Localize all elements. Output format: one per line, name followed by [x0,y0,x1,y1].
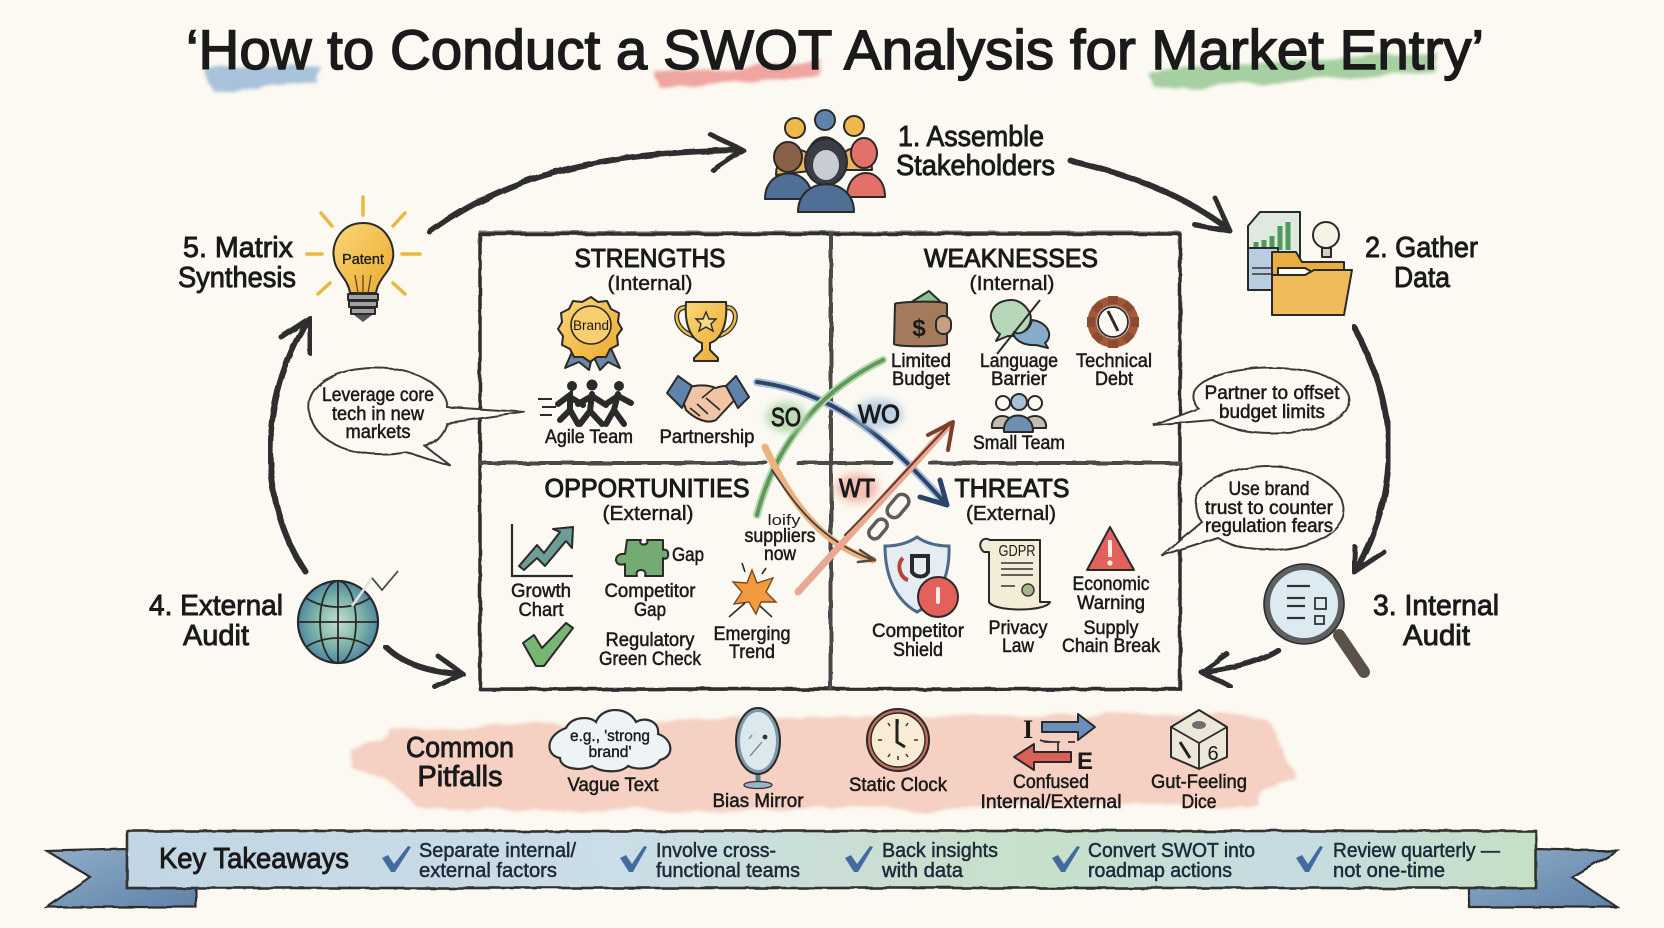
label: step 1 [896,121,1055,182]
heading: common pitfalls [406,732,514,793]
label: supply chain break: Supply [1084,618,1139,639]
panel: weaknesses [891,243,1152,454]
item: vague text cloud [549,710,670,796]
icon: language barrier [991,300,1049,354]
step 3: internal audit [1264,564,1499,672]
takeaway 2: functional teams [656,860,800,882]
label: language barrier: Barrier [991,369,1048,390]
takeaway 3: with data [881,860,964,882]
panel: strengths [538,243,754,448]
icon: stakeholders group [765,110,885,212]
arrow: WT [798,422,953,592]
takeaway 1: Separate internal/ [419,840,576,862]
icon: brand medal: Brand [573,317,609,333]
item: gut-feeling dice: 6 [1207,743,1219,765]
label: limited budget: Limited [891,351,951,372]
label: competitor gap: Competitor [604,581,696,602]
takeaway 3 [845,840,998,882]
label: economic warning: Economic [1072,574,1150,595]
icon: competitor shield [885,537,958,617]
item: confused internal external: Confused [1013,772,1089,793]
icon: green check [523,623,573,666]
item: confused internal external: Internal/External [980,792,1122,813]
label: language barrier: Language [980,351,1058,372]
label: step 5: Synthesis [178,262,296,294]
step 5: matrix synthesis [178,197,420,322]
item: static clock: Static Clock [849,775,947,796]
icon: growth chart [512,524,573,576]
callout: use brand trust [1162,466,1344,556]
callout: use brand trust: trust to counter [1205,498,1334,519]
label: competitor shield: Competitor [872,621,965,642]
label: small team: Small Team [973,433,1065,454]
label: technical debt [1076,351,1152,390]
callout: leverage core tech: Leverage core [322,385,434,406]
label: step 2: Data [1394,262,1451,294]
step 1: assemble stakeholders [765,110,1055,212]
callout: leverage core tech: markets [346,422,410,443]
label: competitor gap: Gap [634,600,666,621]
icon: technical debt gear [1087,296,1139,348]
label: gap: Gap [672,545,704,566]
label: emerging trend [714,624,790,663]
heading: strengths: STRENGTHS [574,243,726,273]
label: technical debt: Technical [1076,351,1152,372]
takeaway 5 [1296,840,1500,882]
callout: leverage core tech: tech in new [332,404,424,425]
label: step 5 [178,232,296,294]
icon: broken chain [866,492,912,541]
note: suppliers: suppliers [744,526,816,547]
panel: threats [866,473,1160,661]
arrow: step 2 to 3 [1354,327,1389,572]
label: competitor shield: Shield [893,640,943,661]
item: gut-feeling dice [1151,710,1247,813]
label: economic warning: Warning [1077,593,1145,614]
item: vague text cloud: Vague Text [568,775,659,796]
label: step 4: Audit [183,620,249,652]
ribbon tail: right [1469,849,1617,907]
callout: use brand trust: regulation fears [1205,516,1333,537]
note: suppliers: now [764,544,796,565]
takeaway 4: roadmap actions [1088,860,1232,882]
label: regulatory green check: Regulatory [606,630,695,651]
label: partnership: Partnership [660,427,754,448]
label: economic warning [1072,574,1150,614]
label: step 3: Audit [1403,620,1470,652]
label: privacy law [988,618,1048,657]
icon: magnifying glass [1264,564,1364,672]
takeaway 3: Back insights [882,840,998,862]
icon: emerging trend burst [729,563,776,617]
label: agile team: Agile Team [545,427,633,448]
note: suppliers: loify [768,512,801,529]
label: WT: WT [839,473,875,503]
icon: wallet: $ [912,315,926,342]
label: competitor shield [872,621,965,661]
label: emerging trend: Trend [729,642,775,663]
label: step 2: 2. Gather [1365,232,1478,264]
icon: globe with trend [298,571,398,663]
label: step 5: 5. Matrix [183,232,293,264]
callout: partner to offset: budget limits [1219,402,1325,423]
label: step 4: 4. External [149,590,283,622]
label: regulatory green check: Green Check [599,649,701,670]
label: growth chart: Chart [518,600,564,621]
heading: common pitfalls: Pitfalls [418,761,502,793]
icon: warning triangle [1087,527,1134,570]
arrow: step 1 to 2 [1071,161,1230,231]
arrow: SO [757,360,883,515]
item: static clock [849,709,947,796]
heading: key takeaways: Key Takeaways [159,843,349,875]
icon: data folder [1248,212,1352,315]
step 4: external audit [149,571,398,663]
label: language barrier [980,351,1058,390]
item: vague text cloud: e.g., 'strong [570,728,650,745]
banner: key takeaways [47,831,1617,907]
icon: puzzle piece [616,540,668,576]
item: confused internal external: E [1077,748,1093,775]
label: step 1: 1. Assemble [898,121,1044,153]
note: suppliers [744,512,816,565]
callout: partner to offset: Partner to offset [1204,383,1340,404]
label: emerging trend: Emerging [714,624,790,645]
icon: GDPR scroll: GDPR [998,543,1036,560]
callout: leverage core tech [309,368,525,466]
icon: handshake [667,376,749,422]
label: step 3 [1373,590,1499,652]
arrow: ST [765,447,875,562]
heading: opportunities: OPPORTUNITIES [544,473,750,503]
label: WO: WO [858,399,900,429]
icon: GDPR scroll [980,539,1050,610]
label: growth chart [511,581,571,621]
takeaway 1: external factors [419,860,557,882]
label: step 4 [149,590,283,652]
label: regulatory green check [599,630,701,670]
item: gut-feeling dice: Gut-Feeling [1151,772,1247,793]
ribbon tail: left [47,849,196,907]
panel: common pitfalls [350,708,1295,813]
arrow: step 5 to 1 [430,135,743,232]
takeaway 2 [620,840,800,882]
callout: use brand trust: Use brand [1228,479,1310,500]
icon: wallet [894,291,951,346]
icon: running team [538,380,631,424]
label: step 2 [1365,232,1478,294]
label: step 3: 3. Internal [1373,590,1499,622]
item: confused internal external: I [1023,715,1033,744]
subheading: internal: (Internal) [970,273,1054,295]
label: step 1: Stakeholders [896,150,1055,182]
subheading: internal: (Internal) [608,273,692,295]
arrow: WO [757,382,947,505]
item: confused internal external [980,714,1122,813]
arrow: step 3 to matrix [1201,650,1278,686]
label: technical debt: Debt [1095,369,1134,390]
icon: brand medal [558,297,622,370]
label: competitor gap [604,581,696,621]
process loop [149,110,1499,687]
label: supply chain break: Chain Break [1062,636,1160,657]
callout: partner to offset [1153,368,1349,433]
takeaway 2: Involve cross- [656,840,776,862]
heading: weaknesses: WEAKNESSES [924,243,1098,273]
cross-quadrant strategy arrows [757,360,953,592]
title: ‘How to Conduct a SWOT Analysis for Market Entry’ [186,18,1484,81]
heading: threats: THREATS [954,473,1070,503]
icon: light bulb: Patent [342,251,385,268]
icon: small team [992,394,1046,432]
step 2: gather data [1248,212,1478,315]
item: bias mirror [712,708,804,812]
label: limited budget [891,351,951,390]
icon: trophy [677,302,735,361]
subheading: external: (External) [966,503,1056,525]
panel: opportunities [511,473,816,670]
takeaway 5: not one-time [1333,860,1445,882]
label: SO: SO [771,402,801,432]
takeaway 4: Convert SWOT into [1088,840,1255,862]
takeaway 5: Review quarterly — [1333,840,1500,862]
takeaway 1 [382,840,576,882]
subheading: external: (External) [602,503,694,525]
label: privacy law: Law [1002,636,1034,657]
label: limited budget: Budget [892,369,951,390]
SWOT matrix [480,232,1180,690]
label: privacy law: Privacy [988,618,1048,639]
arrow: step 4 to 5 [270,318,310,571]
item: gut-feeling dice: Dice [1182,792,1216,813]
icon: light bulb [307,197,420,322]
heading: common pitfalls: Common [406,732,514,764]
matrix frame [480,232,1180,690]
label: growth chart: Growth [511,581,571,602]
item: vague text cloud: brand' [588,744,632,761]
label: supply chain break [1062,618,1160,657]
ribbon body [127,831,1536,888]
item: bias mirror: Bias Mirror [712,791,804,812]
takeaway 4 [1052,840,1255,882]
watercolor band [350,714,1295,810]
arrow: step 4 to matrix [386,647,463,687]
